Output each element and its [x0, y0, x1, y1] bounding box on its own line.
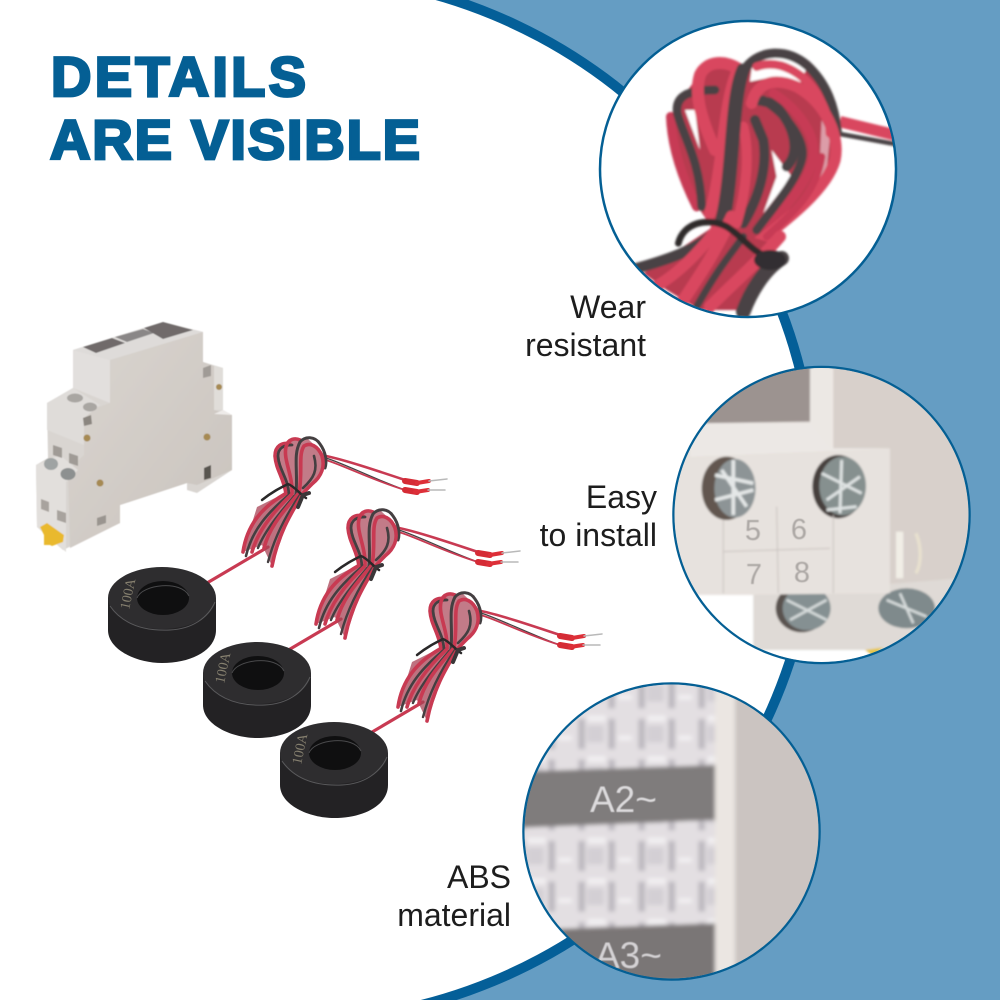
ring label 1: 100A — [118, 576, 140, 611]
label: wear resistant — [525, 289, 646, 363]
terminal numbers: 8 — [794, 557, 810, 589]
label: ABS material: ABS — [447, 859, 511, 895]
label: wear resistant: resistant — [525, 327, 646, 363]
blue curved panel — [421, 0, 1000, 1000]
housing label A2: A2~ — [590, 779, 657, 820]
current transformer ring 2 with leads — [203, 510, 520, 738]
current transformer ring 1 with leads — [108, 438, 447, 663]
terminal numbers: 7 — [746, 559, 762, 591]
label: easy to install: to install — [540, 517, 657, 553]
terminal numbers: 6 — [791, 514, 807, 546]
label: easy to install — [540, 479, 657, 553]
label: ABS material: material — [397, 897, 511, 933]
label: ABS material — [397, 859, 511, 933]
detail circle: screw terminals — [670, 360, 980, 670]
label: wear resistant: Wear — [570, 289, 646, 325]
current transformer ring 3 with leads — [280, 593, 602, 818]
housing label A3: A3~ — [595, 935, 662, 976]
detail circle: wires — [600, 21, 896, 317]
ring label 2: 100A — [213, 650, 235, 685]
title: DETAILS — [51, 45, 306, 108]
ring label 3: 100A — [290, 731, 312, 766]
label: easy to install: Easy — [586, 479, 657, 515]
detail circle: ABS housing — [522, 682, 821, 981]
terminal numbers: 5 — [745, 515, 761, 547]
title — [50, 45, 420, 171]
title: ARE VISIBLE — [50, 108, 420, 171]
terminal numbers — [746, 518, 810, 584]
product photo: din-rail contactor device — [36, 322, 232, 552]
